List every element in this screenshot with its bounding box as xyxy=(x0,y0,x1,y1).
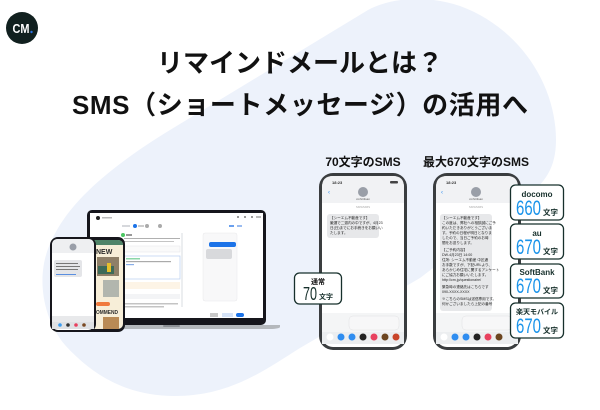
phone: 70 character message: たします。 xyxy=(330,230,348,235)
phone: 670 character message: す。予約の日程が明日となりま xyxy=(442,230,492,235)
back phone: NEW promo: NEW xyxy=(96,249,113,256)
badge: docomo: 文字 xyxy=(543,207,558,217)
badge: au: 670 xyxy=(516,236,541,259)
phone: 670 character message: ※こちらのSMSは送信専用です。 xyxy=(442,296,496,301)
phone: 70 character message: cmficilisan xyxy=(356,197,370,201)
phone: 70 character message: 厳選で二週内の中ですが、4月23 xyxy=(330,220,383,225)
laptop screen app xyxy=(96,216,261,317)
badge: normal 70 characters: 通常 xyxy=(311,277,325,286)
badge: SoftBank: SoftBank xyxy=(519,268,555,277)
badge: normal 70 characters: 70 xyxy=(303,284,317,304)
phone: 670 character message: 【シーエム不動産です】 xyxy=(442,215,482,220)
phone: 670 character message: この度は、弊社への相談誠にご予 xyxy=(442,220,496,225)
badge: Rakuten Mobile xyxy=(510,303,564,338)
laptop xyxy=(87,210,280,329)
badge: SoftBank xyxy=(510,264,564,298)
phone: 70 character message: 日(日)までにお手続きをお願いい xyxy=(330,225,383,230)
phone: 70 character message: ‹ xyxy=(328,190,330,196)
phone: 70 character message: 18:23 xyxy=(332,180,343,185)
phone: 70 character message: SMS/MMS xyxy=(356,205,370,209)
badge: au: au xyxy=(532,229,542,238)
phone: 670 character message: 090-XXXX-XXXX xyxy=(442,290,470,294)
phone: 670 character message: あらかじめ住宅に関するアンケート xyxy=(442,267,500,272)
phone: 670 character message: http://cm.jp/questionaire/ xyxy=(442,278,481,282)
title: リマインドメールとは？ xyxy=(157,48,443,78)
badge: normal 70 characters xyxy=(294,273,342,304)
phone: 670 character message: 何かございましたら上記の番号 xyxy=(442,301,493,306)
phone: 670 character message: ‹ xyxy=(441,190,443,196)
badge: au xyxy=(510,224,564,259)
title xyxy=(72,48,528,120)
badge: Rakuten Mobile: 670 xyxy=(516,315,541,338)
badge: normal 70 characters: 文字 xyxy=(319,292,333,301)
badge: Rakuten Mobile: 文字 xyxy=(543,325,558,335)
heading: up to 670 characters SMS: 最大670文字のSMS xyxy=(423,154,529,169)
badge: SoftBank: 文字 xyxy=(543,285,558,295)
badge: docomo xyxy=(510,185,564,220)
phone: 670 character message xyxy=(433,173,521,350)
logo: CM xyxy=(6,12,38,44)
title: SMS（ショートメッセージ）の活用へ xyxy=(72,90,528,120)
phone: 670 character message: したので、当日ご予約のお時 xyxy=(442,235,489,240)
phone: 670 character message: 約いただきありがとうございま xyxy=(442,225,493,230)
logo: CM: CM xyxy=(12,21,30,36)
badge: docomo: docomo xyxy=(521,190,553,199)
badge: docomo: 660 xyxy=(516,197,541,220)
phone: 670 character message: 間をお送りします。 xyxy=(442,240,474,245)
badge: Rakuten Mobile: 楽天モバイル xyxy=(516,307,558,316)
front phone: SMS xyxy=(50,237,96,332)
phone: 70 character message xyxy=(319,173,407,350)
badge: SoftBank: 670 xyxy=(516,275,541,298)
heading: 70 characters SMS: 70文字のSMS xyxy=(325,154,401,169)
back phone: NEW promo: OMMEND xyxy=(96,310,118,316)
phone: 70 character message: 【シーエム不動産です】 xyxy=(330,215,370,220)
badge: au: 文字 xyxy=(543,246,558,256)
phone: 670 character message: にご協力お願いいたします。 xyxy=(442,272,488,277)
phone: 670 character message: 緊急時の連絡先はこちらです xyxy=(442,284,489,289)
phone: 670 character message: cmficilisan xyxy=(469,197,483,201)
phone: 670 character message: DW-4月23日 14:00 xyxy=(442,252,472,257)
back phone: NEW promo xyxy=(82,237,125,332)
phone: 670 character message: お手数ですが、下記URLより、 xyxy=(442,262,492,267)
phone: 670 character message: 18:23 xyxy=(446,180,457,185)
phone: 670 character message: SMS/MMS xyxy=(469,205,483,209)
phone: 670 character message: 【ご予約内容】 xyxy=(442,247,467,252)
phone: 670 character message: 住所: シーエム不動産 中区通 xyxy=(442,257,489,262)
